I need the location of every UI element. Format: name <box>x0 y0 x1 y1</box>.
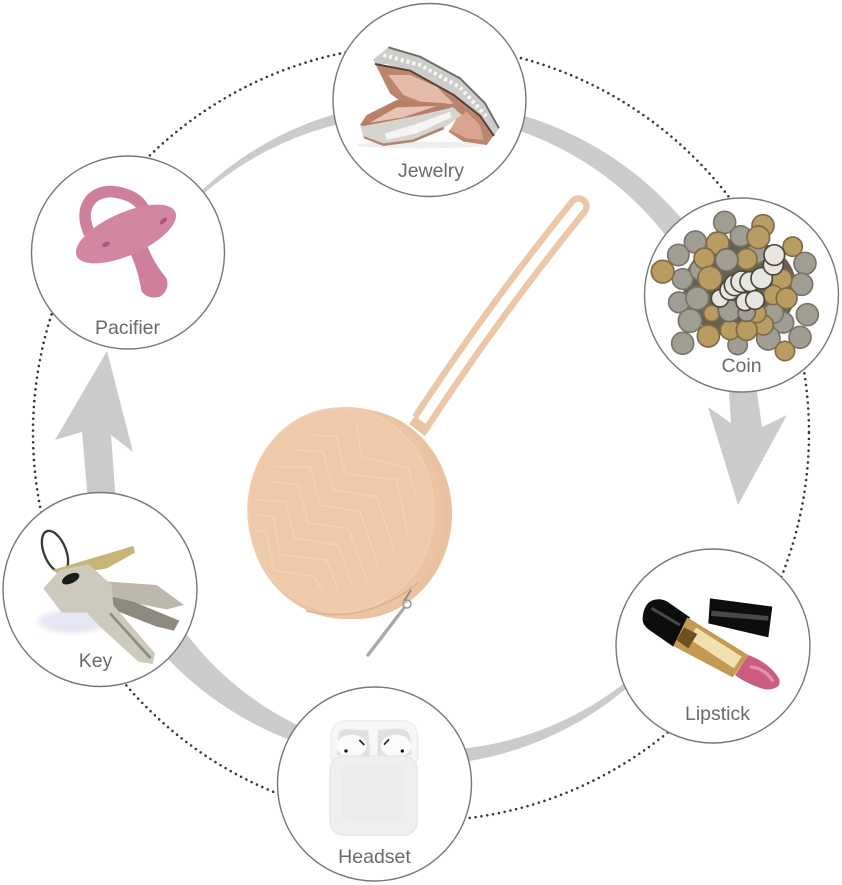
label: Key <box>79 650 113 672</box>
label: Coin <box>721 355 762 377</box>
pouch front face <box>248 408 434 612</box>
arc: pacifier to jewelry <box>194 111 349 200</box>
label: Jewelry <box>398 160 464 182</box>
icon: pile of coins <box>651 211 818 361</box>
panel: pacifier <box>32 156 224 349</box>
icon: earbuds case <box>330 721 418 835</box>
arc: headset to key <box>153 623 333 752</box>
arc: lipstick to headset <box>443 665 648 764</box>
panel: jewelry <box>333 4 526 196</box>
panel: lipstick <box>616 549 810 743</box>
cycle ring: tapered grey arrows <box>55 111 787 764</box>
label: Lipstick <box>685 703 750 725</box>
strap loop <box>412 198 587 432</box>
icon: lipstick and cap <box>643 598 780 689</box>
label: Pacifier <box>95 317 161 339</box>
panel: key <box>3 492 197 686</box>
pouch body <box>260 409 452 619</box>
zipper seam <box>306 583 418 615</box>
arrow: key to pacifier <box>55 351 133 530</box>
icon: rings <box>357 47 499 148</box>
product: peach silicone pouch with strap <box>248 198 587 655</box>
panel: coin <box>644 198 838 392</box>
label: Headset <box>338 846 411 868</box>
chevron pattern <box>255 425 417 592</box>
icon: bunch of keys <box>37 527 184 664</box>
panel: headset <box>278 687 472 881</box>
icon: pink pacifier <box>68 192 184 298</box>
arrow: coin to lipstick <box>708 375 787 505</box>
arc: jewelry to coin <box>503 111 701 257</box>
zipper pull <box>368 590 411 655</box>
